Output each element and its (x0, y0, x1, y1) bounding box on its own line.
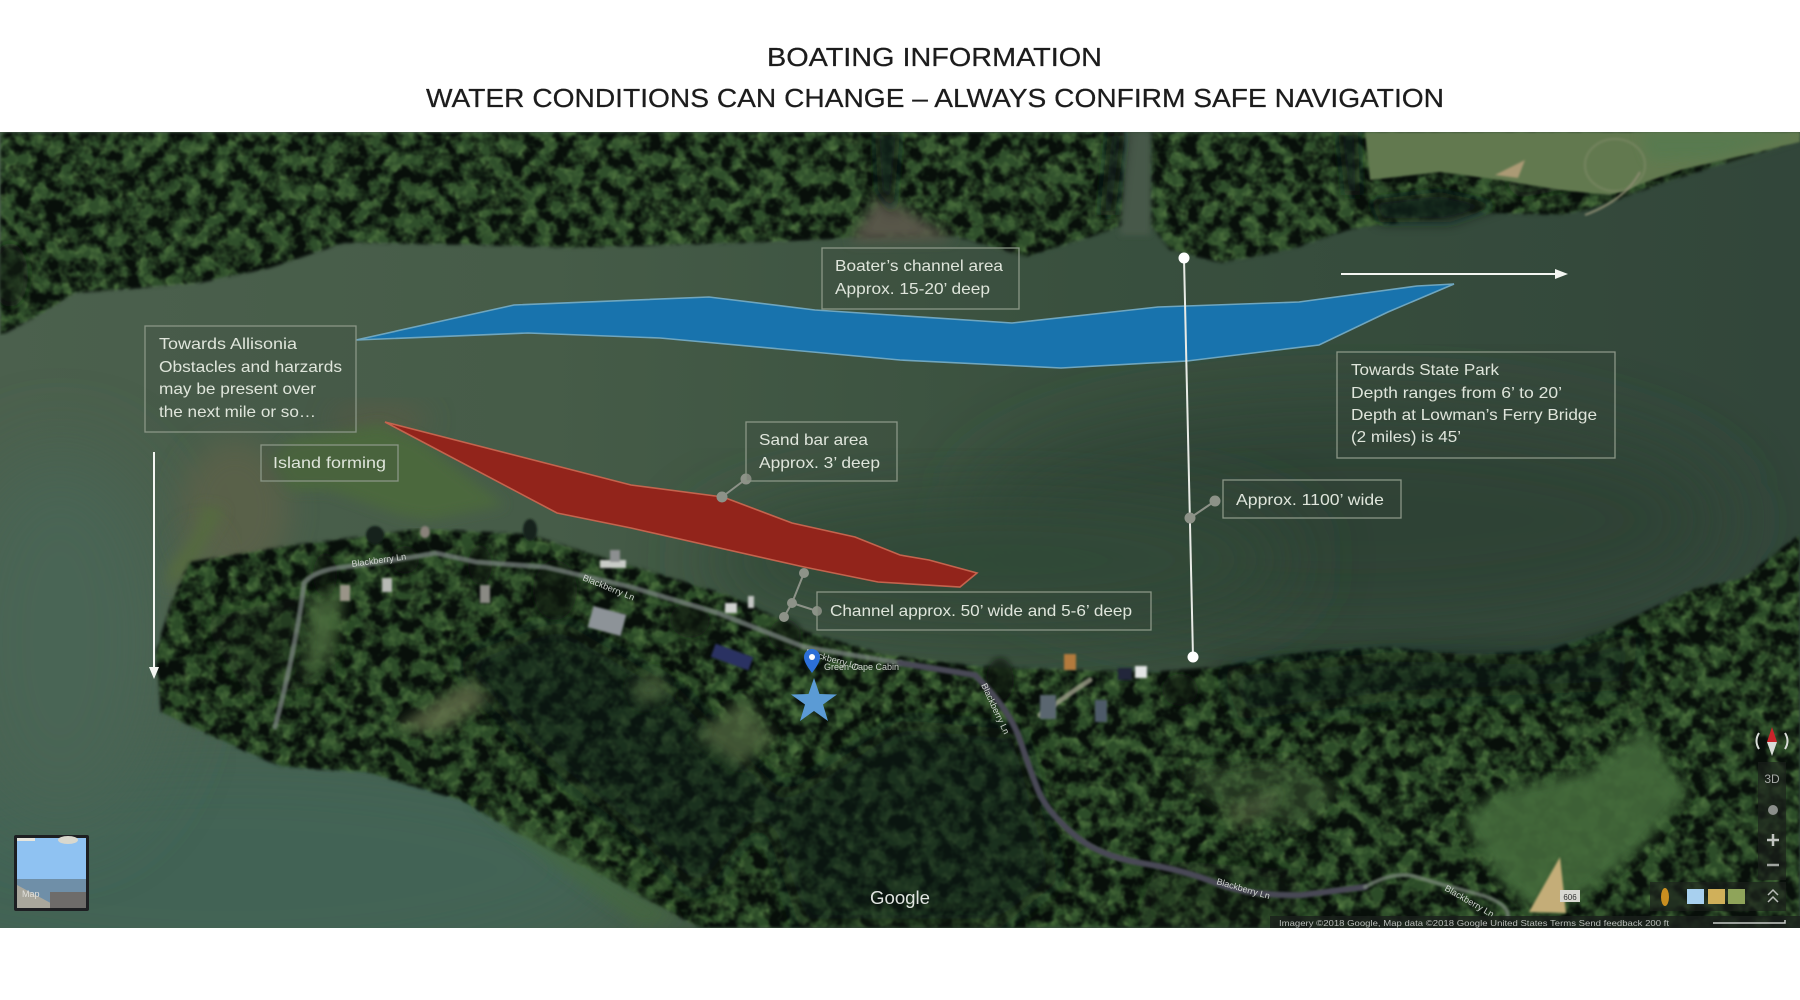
google map controls (1270, 727, 1800, 928)
south land (155, 528, 1800, 928)
callout: island forming: Island forming (273, 455, 386, 472)
callout: towards Allisonia: Obstacles and harzards (159, 359, 342, 376)
callout: towards Allisonia (145, 326, 356, 432)
google map controls: 3D (1764, 772, 1780, 786)
icon: star (791, 678, 837, 721)
callout connector: channel (779, 568, 822, 622)
callout connector: width (1184, 496, 1220, 524)
title: WATER CONDITIONS CAN CHANGE – ALWAYS CONFIRM SAFE NAVIGATION (426, 83, 1444, 113)
red sand bar area (385, 422, 977, 587)
road labels: Green Cape Cabin (824, 662, 899, 672)
callout: sand bar: Approx. 3’ deep (759, 455, 880, 472)
route badge: 606 (1563, 893, 1577, 902)
callout connector: sand bar (716, 474, 752, 502)
callout: towards State Park: (2 miles) is 45’ (1351, 429, 1461, 446)
shoreline houses (340, 519, 1147, 722)
callout: boater's channel: Approx. 15-20’ deep (835, 281, 990, 298)
attribution bar: Imagery ©2018 Google, Map data ©2018 Google United States Terms Send feedback 200 ft (1279, 918, 1670, 928)
callout: towards Allisonia: Towards Allisonia (159, 336, 297, 353)
map thumbnail (14, 835, 89, 911)
callout: channel: Channel approx. 50’ wide and 5-6’ deep (830, 603, 1132, 620)
road labels: Blackberry Ln (804, 647, 860, 671)
zoom panel (1758, 762, 1786, 880)
road labels: Blackberry Ln (581, 573, 636, 602)
callout: towards State Park: Towards State Park (1351, 362, 1500, 379)
arrow: towards State Park (1341, 269, 1568, 279)
blue channel area (356, 284, 1454, 368)
creek inlet (1120, 132, 1150, 235)
small dark tree clumps (313, 545, 1198, 706)
road labels: Blackberry Ln (979, 682, 1012, 736)
island forming (170, 428, 492, 580)
top-right field (1365, 132, 1800, 215)
width measure line (1178, 252, 1198, 662)
callout: width: Approx. 1100’ wide (1236, 492, 1384, 509)
dark forest shadows (0, 132, 1620, 307)
callout: towards State Park: Depth at Lowman’s Ferry Bridge (1351, 407, 1597, 424)
callout: boater's channel (822, 248, 1019, 309)
road labels (351, 551, 1496, 919)
route badge (1560, 890, 1580, 902)
arrow: towards Allisonia (149, 452, 159, 679)
callout: channel (817, 592, 1151, 630)
callout: towards Allisonia: may be present over (159, 381, 317, 398)
icon: location pin (804, 649, 820, 673)
road labels: Blackberry Ln (1443, 883, 1496, 919)
callout: boater's channel: Boater’s channel area (835, 258, 1003, 275)
callout: sand bar (746, 422, 897, 481)
land shading (200, 545, 1690, 928)
road labels: Blackberry Ln (351, 551, 407, 569)
top forest shore (0, 132, 1800, 336)
roads (275, 553, 1508, 917)
attribution bar (1270, 916, 1800, 928)
callout: island forming (261, 445, 398, 481)
title (426, 42, 1444, 113)
callout: towards State Park (1337, 352, 1615, 458)
map thumbnail: Map (22, 889, 40, 899)
layer panel (1650, 882, 1786, 911)
google logo text: Google (870, 888, 930, 908)
callout: towards Allisonia: the next mile or so… (159, 404, 316, 421)
title: BOATING INFORMATION (767, 42, 1102, 72)
compass (1756, 727, 1788, 756)
callout: sand bar: Sand bar area (759, 432, 868, 449)
callout: towards State Park: Depth ranges from 6’ to 20’ (1351, 385, 1562, 402)
callout: width (1223, 480, 1401, 518)
road labels: Blackberry Ln (1215, 876, 1271, 901)
